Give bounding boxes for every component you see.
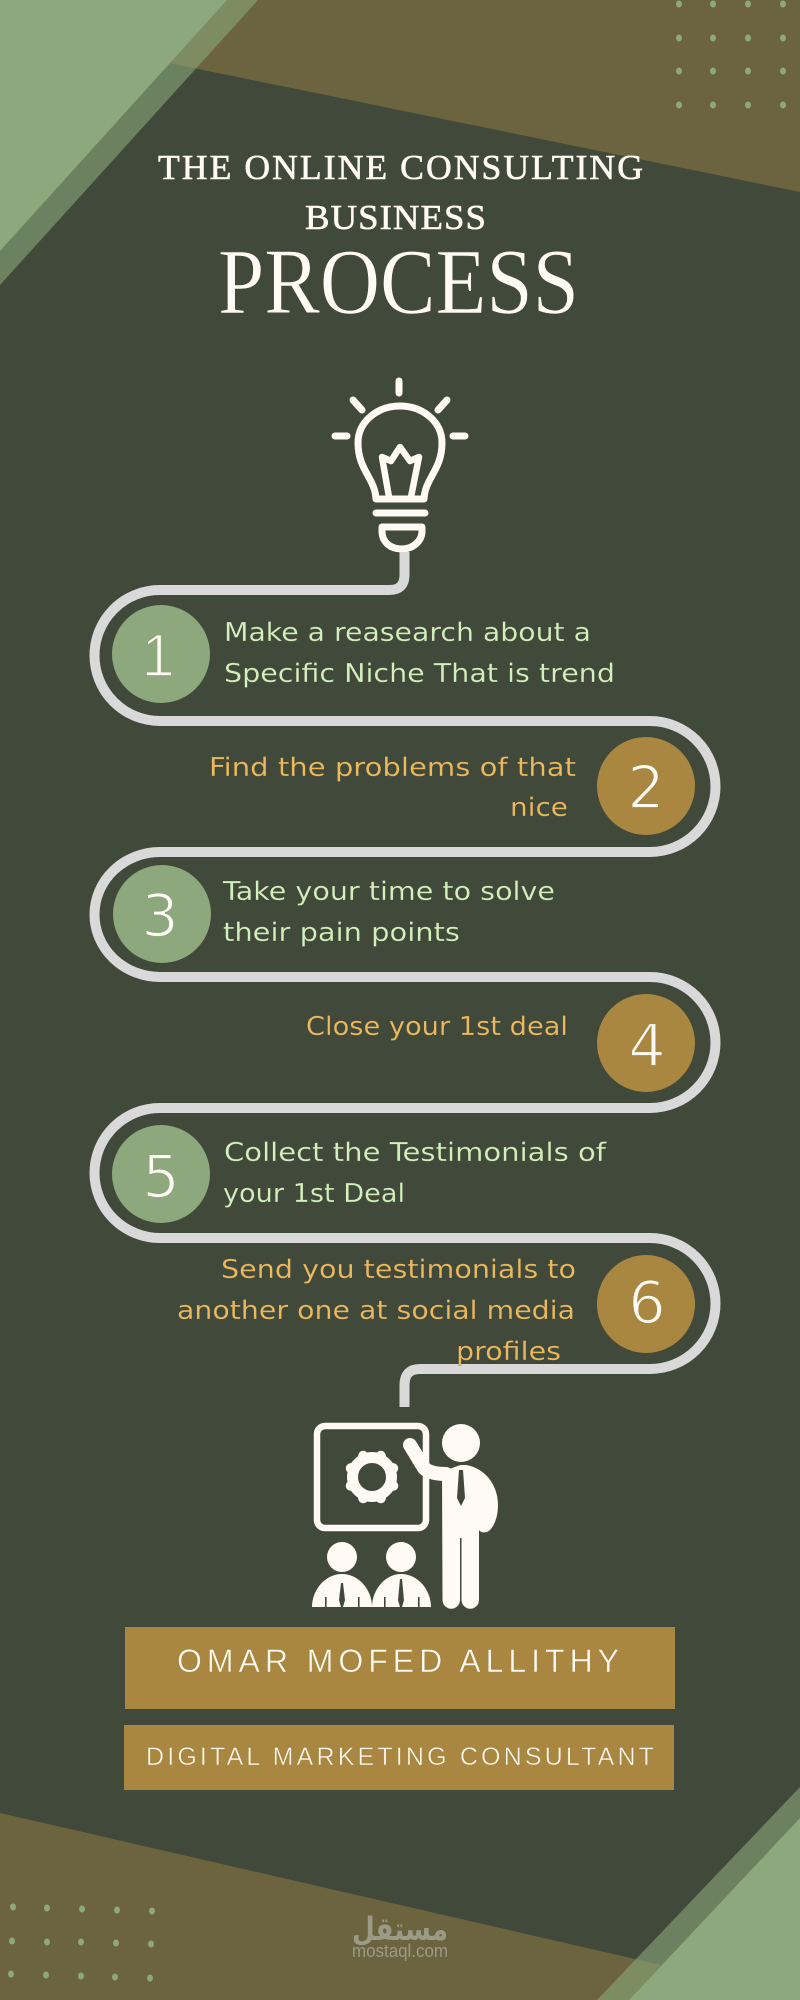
step 2 number: 2: [627, 753, 665, 822]
watermark latin: mostaql.com: [352, 1941, 448, 1961]
name text: OMAR MOFED ALLITHY: [177, 1643, 619, 1679]
top-left green triangle: [0, 0, 227, 251]
name banner: [125, 1627, 675, 1709]
bottom-right translucent strip: [597, 1787, 800, 2000]
top-right dot grid: [676, 0, 786, 108]
bottom-left dot grid: [8, 1904, 155, 1982]
gear: [351, 1456, 393, 1498]
step 6 text: profiles: [456, 1337, 561, 1367]
role text: DIGITAL MARKETING CONSULTANT: [146, 1743, 654, 1771]
title word: process: PROCESS: [218, 231, 579, 334]
step 5 text: your 1st Deal: [223, 1179, 405, 1209]
watermark arabic: مستقل: [352, 1910, 448, 1948]
step 2 text: nice: [510, 793, 568, 823]
presentation board: [317, 1426, 426, 1528]
top-right olive shape: [169, 0, 800, 192]
step 3 text: [222, 877, 555, 948]
step 3 text: their pain points: [223, 918, 460, 948]
step 4 number: 4: [628, 1011, 666, 1080]
step 5 text: Collect the Testimonials of: [224, 1138, 607, 1168]
step 6 text: another one at social media: [177, 1296, 575, 1326]
step 6 number: 6: [628, 1268, 666, 1337]
step 3: [113, 865, 555, 963]
step 6 badge: [597, 1255, 695, 1353]
icon: presenter with audience: [312, 1424, 498, 1609]
icon: light bulb: [335, 381, 465, 549]
step 2 badge: [597, 737, 695, 835]
step 1 number: 1: [141, 622, 175, 689]
title: [158, 148, 645, 334]
step 1 badge: [112, 605, 210, 703]
step 1 text: [224, 618, 615, 689]
bottom-left olive shape: [0, 1813, 661, 2000]
step 3 text: Take your time to solve: [222, 877, 555, 907]
step 1 text: Make a reasearch about a: [224, 618, 591, 648]
step 4 badge: [597, 994, 695, 1092]
title line 2: BUSINESS: [305, 198, 487, 237]
step 3 number: 3: [141, 881, 179, 950]
title line 1: THE ONLINE CONSULTING: [158, 148, 645, 187]
step 6: [177, 1255, 695, 1367]
presenter: [410, 1424, 498, 1609]
role banner: [124, 1725, 674, 1790]
step 2: [209, 737, 695, 835]
step 5 text: [223, 1138, 607, 1209]
step 5 badge: [112, 1125, 210, 1223]
step 5: [112, 1125, 607, 1223]
top-left translucent strip: [0, 0, 258, 285]
winding path: [94, 552, 716, 1407]
step 2 text: [209, 753, 576, 823]
step 4: [306, 994, 695, 1092]
bottom-right green triangle: [629, 1818, 800, 2000]
step 1 text: Specific Niche That is trend: [224, 659, 615, 689]
audience: [312, 1542, 431, 1607]
watermark: [352, 1910, 448, 1961]
step 5 number: 5: [142, 1142, 180, 1211]
step 4 text: Close your 1st deal: [306, 1012, 568, 1042]
step 2 text: Find the problems of that: [209, 753, 576, 783]
step 1: [112, 605, 615, 703]
step 6 text: Send you testimonials to: [221, 1255, 576, 1285]
step 3 badge: [113, 865, 211, 963]
step 6 text: [177, 1255, 576, 1367]
